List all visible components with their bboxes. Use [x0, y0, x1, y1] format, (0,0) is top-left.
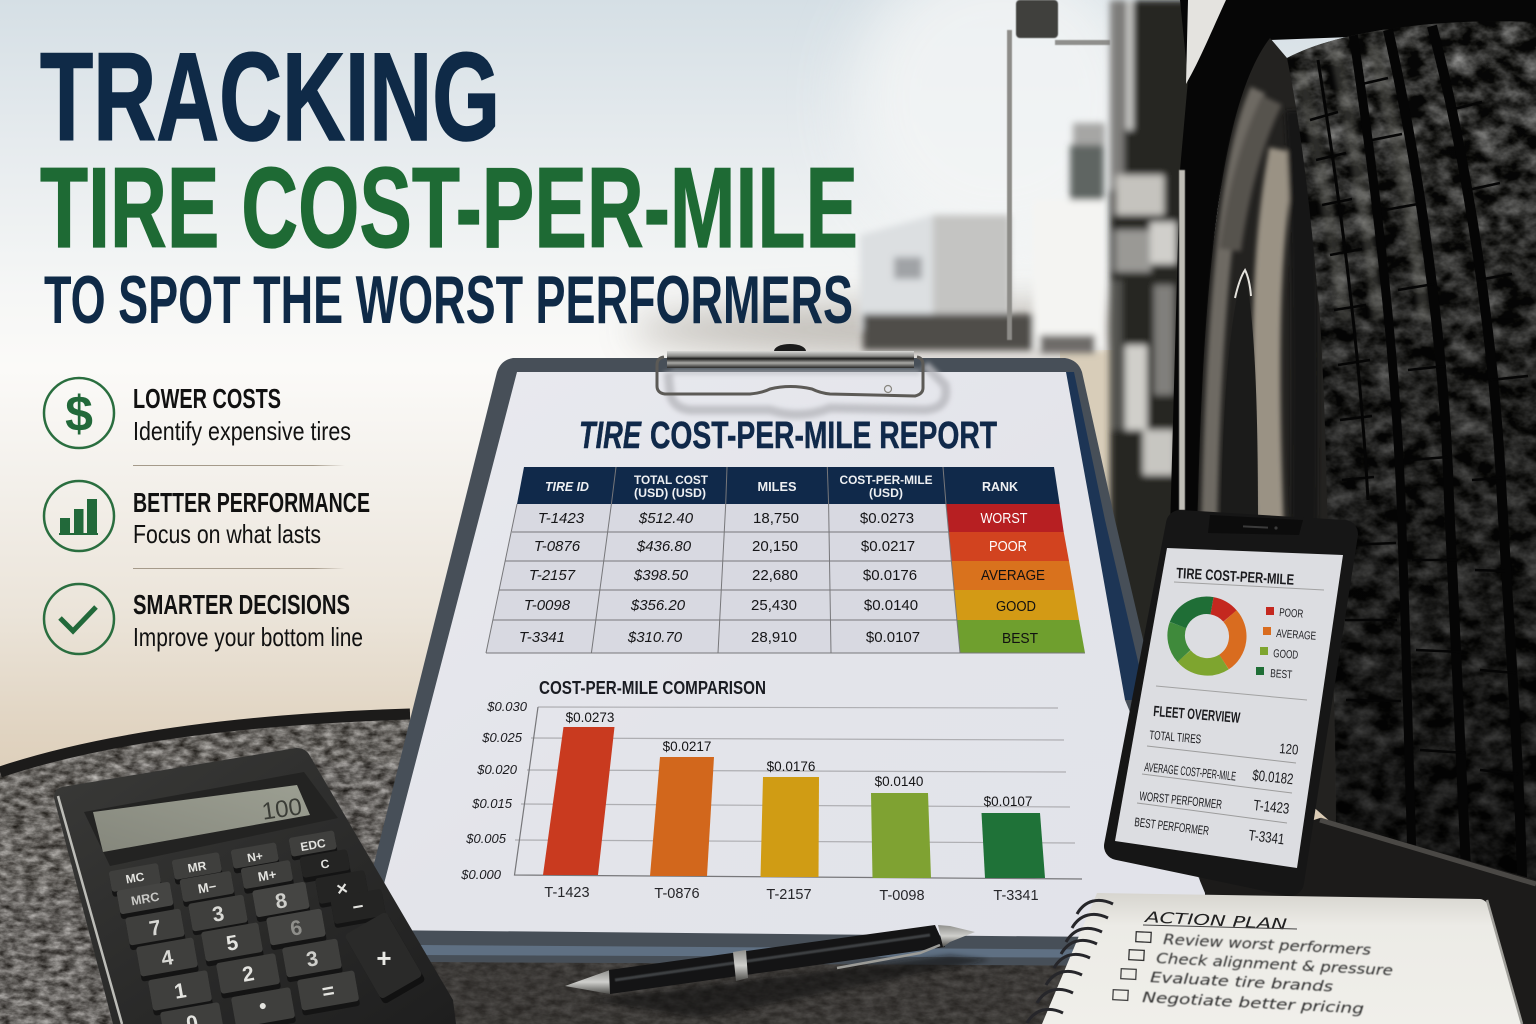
desk bottom center: [430, 962, 1066, 1024]
desk surface: [0, 700, 1536, 1024]
calculator keys: 3: [211, 902, 226, 927]
headline: [40, 28, 858, 338]
table rows: $0.0140: [864, 597, 918, 614]
phone screen: [1115, 548, 1343, 868]
fleet overview: T-1423: [1253, 797, 1290, 818]
fleet overview: AVERAGE COST-PER-MILE: [1144, 760, 1237, 784]
table rows: T-2157: [529, 567, 576, 584]
calculator keys: ×: [335, 878, 350, 901]
action checklist: Check alignment & pressure: [1156, 951, 1393, 979]
headline line 1: TRACKING: [40, 28, 500, 167]
calculator keys: 6: [289, 916, 304, 941]
notebook spiral: [1027, 900, 1113, 1023]
action checklist: Negotiate better pricing: [1142, 990, 1364, 1018]
clipboard board: [372, 358, 1200, 966]
bar chart: [460, 699, 1082, 904]
report title: [579, 415, 997, 457]
table rows: [519, 510, 920, 646]
benefit text: Improve your bottom line: [133, 622, 363, 652]
x axis labels: T-3341: [993, 888, 1039, 904]
rank labels: [980, 511, 1045, 647]
bar value labels: [566, 710, 1032, 809]
y axis labels: $0.030: [486, 699, 528, 714]
table rows: 20,150: [752, 538, 798, 555]
icon: bar chart: [44, 481, 114, 551]
bar T-0098: [871, 793, 931, 878]
benefit: smarter decisions: [44, 584, 363, 654]
table rows: $0.0217: [861, 538, 915, 555]
y axis labels: $0.005: [465, 831, 507, 846]
calculator keys: 1: [173, 979, 188, 1004]
report title: COST-PER-MILE REPORT: [650, 415, 997, 457]
calculator body: [54, 748, 456, 1024]
donut legend: [1256, 607, 1317, 682]
benefit text: BETTER PERFORMANCE: [133, 487, 370, 518]
action plan heading: ACTION PLAN: [1143, 908, 1288, 933]
benefit: lower costs: [44, 378, 351, 448]
fleet overview: WORST PERFORMER: [1139, 789, 1223, 812]
action checklist: Review worst performers: [1163, 932, 1372, 959]
clip mechanism: [657, 344, 923, 396]
calculator keys: 2: [241, 962, 256, 987]
action plan heading: [1143, 908, 1297, 933]
phone body: [1118, 524, 1344, 882]
icon: dollar: [44, 378, 114, 448]
table rows: $512.40: [638, 510, 694, 527]
donut legend: BEST: [1270, 668, 1293, 682]
headline line 2: TIRE COST-PER-MILE: [40, 145, 858, 272]
fleet overview: [1134, 703, 1299, 848]
phone header: TIRE COST-PER-MILE: [1176, 565, 1295, 589]
fender and wheel well: [1170, 0, 1536, 530]
calculator keys: 5: [225, 931, 240, 956]
x axis labels: T-0876: [654, 886, 700, 902]
calculator keys: MRC: [130, 890, 160, 908]
table rows: 18,750: [753, 510, 799, 527]
clip shadow on paper: [668, 365, 946, 415]
calculator keys: 4: [160, 946, 175, 971]
icon: dollar: $: [65, 386, 93, 442]
report paper: [372, 372, 1205, 938]
bar T-0876: [650, 757, 714, 876]
fleet overview: 120: [1279, 740, 1299, 758]
table header: COST-PER-MILE: [840, 473, 932, 487]
rank labels: WORST: [980, 511, 1028, 527]
action checklist: [1113, 932, 1393, 1018]
table header: TOTAL COST: [634, 473, 709, 487]
background: blurred road horizon: [630, 0, 1290, 650]
table header: (USD) (USD): [634, 486, 706, 500]
calculator display: [93, 785, 310, 852]
bar T-2157: [760, 777, 819, 877]
y axis labels: $0.015: [471, 796, 513, 811]
table rows: 22,680: [752, 567, 798, 584]
calculator display: 100: [260, 793, 304, 826]
benefit text: LOWER COSTS: [133, 383, 281, 414]
y axis labels: $0.020: [476, 762, 518, 777]
bar T-1423: [543, 727, 614, 875]
bar value labels: $0.0140: [875, 774, 923, 789]
rank labels: GOOD: [996, 599, 1036, 615]
bar value labels: $0.0176: [767, 759, 815, 774]
table rows: $0.0176: [863, 567, 917, 584]
donut chart: [1176, 605, 1238, 667]
clipboard with report: [372, 344, 1205, 966]
calculator keys: 3: [305, 947, 320, 972]
chart title: COST-PER-MILE COMPARISON: [539, 678, 766, 698]
wheel rim opening: [1221, 268, 1258, 530]
fleet overview: $0.0182: [1252, 767, 1294, 788]
desk right: [1100, 818, 1536, 1024]
x axis labels: T-1423: [544, 885, 590, 901]
table rows: T-3341: [519, 629, 565, 646]
calculator keys: 7: [148, 916, 163, 941]
bar value labels: $0.0217: [663, 739, 711, 754]
rank labels: POOR: [989, 539, 1027, 555]
x axis labels: [544, 885, 1039, 904]
cost table: [486, 467, 1085, 653]
bar value labels: $0.0107: [984, 794, 1032, 809]
report title: TIRE: [579, 415, 642, 457]
table rows: 28,910: [751, 629, 797, 646]
donut legend: GOOD: [1273, 648, 1299, 662]
benefit text: [133, 487, 370, 549]
notebook paper: [1042, 893, 1522, 1024]
calculator keys: 8: [274, 889, 289, 914]
calculator keys: −: [351, 896, 365, 919]
background: distant blurred trucks and pole: [860, 0, 1110, 353]
table rows: T-0098: [524, 597, 571, 614]
fleet overview: T-3341: [1248, 827, 1285, 848]
benefit text: [133, 383, 351, 446]
phone: [1115, 515, 1344, 882]
table rows: $0.0107: [866, 629, 920, 646]
table rows: $0.0273: [860, 510, 914, 527]
y axis labels: $0.025: [481, 730, 523, 745]
calculator keys: [108, 830, 426, 1024]
benefit: better performance: [44, 481, 370, 551]
calculator keys: M+: [257, 866, 278, 884]
calculator keys: C: [320, 856, 331, 872]
calculator: [54, 748, 456, 1024]
table header: TIRE ID: [545, 479, 590, 494]
calculator keys: MR: [187, 858, 208, 876]
action checklist: Evaluate tire brands: [1150, 970, 1334, 996]
bar value labels: $0.0273: [566, 710, 614, 725]
desk left: [0, 700, 420, 1024]
tire: [1190, 10, 1536, 890]
table rows: T-1423: [538, 510, 585, 527]
rank colour cells: [946, 504, 1085, 653]
y axis labels: [460, 699, 528, 882]
pen shadow: [590, 955, 990, 1018]
donut legend: POOR: [1279, 607, 1304, 621]
pen: [565, 925, 990, 1018]
calculator keys: N+: [246, 849, 264, 865]
notebook: action plan: [1027, 893, 1522, 1024]
calculator keys: =: [320, 979, 336, 1004]
benefit text: [133, 589, 363, 652]
table rows: T-0876: [534, 538, 581, 555]
calculator keys: MC: [125, 869, 146, 887]
calculator keys: M−: [197, 878, 218, 896]
calculator keys: •: [257, 995, 269, 1018]
tread: [1280, 10, 1536, 890]
calculator keys: EDC: [299, 836, 327, 854]
table rows: $356.20: [630, 597, 686, 614]
icon: check mark: [44, 584, 114, 654]
rank labels: BEST: [1002, 631, 1038, 647]
headline line 3: TO SPOT THE WORST PERFORMERS: [44, 262, 853, 338]
x axis labels: T-0098: [879, 888, 925, 904]
benefit text: Focus on what lasts: [133, 519, 321, 549]
table header: RANK: [982, 479, 1019, 494]
benefit text: SMARTER DECISIONS: [133, 589, 350, 620]
background: near truck body, blurred: [1110, 0, 1195, 720]
table header: [517, 467, 1060, 504]
tire sidewall: [1190, 38, 1340, 830]
fleet overview: BEST PERFORMER: [1134, 815, 1210, 838]
fleet overview: TOTAL TIRES: [1149, 728, 1202, 747]
table rows: 25,430: [751, 597, 797, 614]
fleet overview: FLEET OVERVIEW: [1153, 703, 1241, 727]
rank labels: AVERAGE: [981, 568, 1045, 584]
x axis labels: T-2157: [766, 887, 812, 903]
table rows: $436.80: [636, 538, 692, 555]
calculator keys: +: [376, 943, 392, 973]
table header: MILES: [758, 479, 797, 494]
y axis labels: $0.000: [460, 867, 502, 882]
table rows: $398.50: [633, 567, 689, 584]
table rows: $310.70: [627, 629, 683, 646]
table header: (USD): [869, 486, 903, 500]
bar T-3341: [982, 813, 1045, 878]
benefit text: Identify expensive tires: [133, 416, 351, 446]
donut legend: AVERAGE: [1276, 628, 1317, 643]
